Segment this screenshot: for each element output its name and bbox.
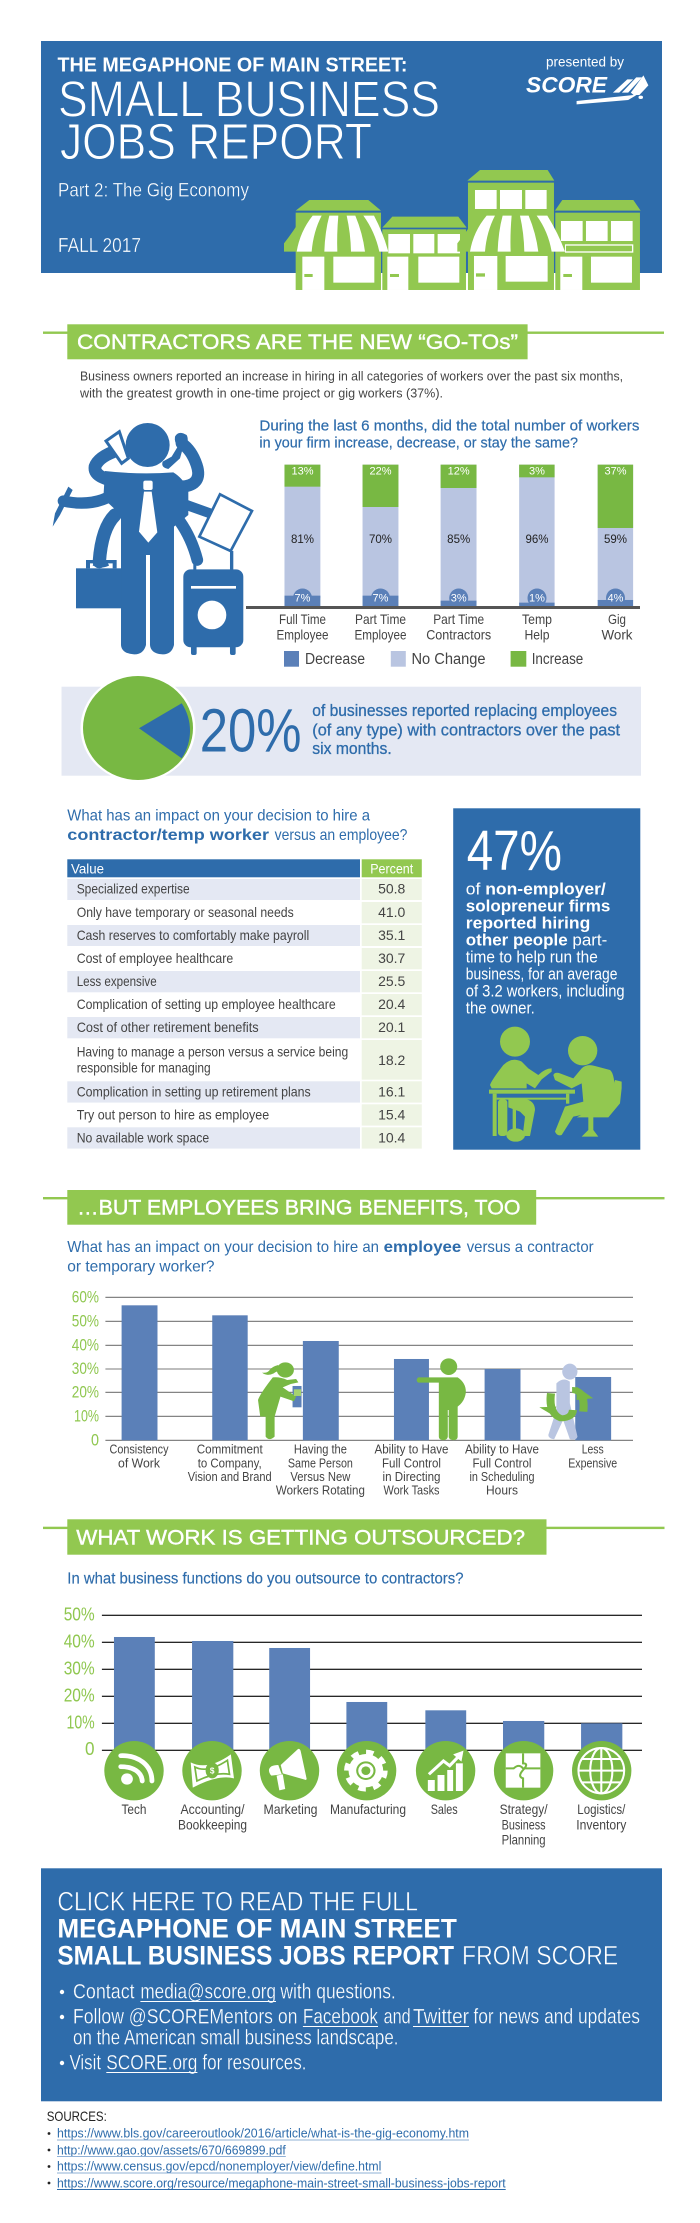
y axis labels: 40% — [64, 1632, 95, 1652]
icon: megaphone — [269, 1749, 307, 1790]
table rows values: 15.4 — [378, 1106, 406, 1122]
decrease values: 1% — [529, 592, 545, 604]
title kicker: THE MEGAPHONE OF MAIN STREET: — [58, 55, 408, 77]
decrease values: 7% — [295, 592, 311, 604]
table rows text: Complication of setting up employee healthcare — [77, 996, 336, 1012]
category labels: Manufacturing — [330, 1801, 406, 1817]
main title: JOBS REPORT — [60, 113, 372, 170]
cta heading: FROM SCORE — [462, 1940, 618, 1970]
category labels — [122, 1801, 626, 1847]
x axis labels: Having the — [294, 1441, 347, 1456]
category labels: Marketing — [264, 1801, 318, 1817]
category labels: Part Time — [355, 611, 406, 627]
panel: 47 percent solopreneurs — [453, 808, 640, 1150]
question: contractor decision: What has an impact on your decision to hire a — [67, 808, 370, 825]
stat description: other people part- — [466, 931, 607, 950]
y axis labels: 50% — [64, 1605, 95, 1625]
table rows values: 35.1 — [378, 927, 406, 943]
cta bullets: on the American small business landscape. — [73, 2027, 398, 2050]
table rows values: 10.4 — [378, 1129, 406, 1145]
source links: http://www.gao.gov/assets/670/669899.pdf — [57, 2142, 286, 2157]
section heading: employees: …BUT EMPLOYEES BRING BENEFITS, TOO — [77, 1196, 520, 1219]
bars — [114, 1637, 622, 1750]
decrease values: 3% — [451, 592, 467, 604]
cta bullets: SCORE.org — [106, 2051, 197, 2074]
icon: sales chart — [428, 1751, 464, 1791]
table rows values: 25.5 — [378, 973, 406, 989]
category labels: Planning — [502, 1831, 546, 1847]
no change values: 59% — [604, 534, 627, 546]
question: workers change: During the last 6 months, did the total number of workers — [259, 418, 639, 435]
cta bullets: for resources. — [202, 2051, 306, 2074]
presented by SCORE logo — [526, 55, 648, 104]
x axis labels: Vision and Brand — [188, 1469, 272, 1484]
table rows text: Only have temporary or seasonal needs — [77, 904, 294, 920]
decrease values — [295, 592, 624, 604]
legend: Decrease — [305, 651, 365, 668]
cta bullets: for news and updates — [473, 2006, 640, 2029]
cta heading: MEGAPHONE OF MAIN STREET — [57, 1913, 457, 1943]
question: contractor decision — [67, 808, 407, 844]
cta bullets — [60, 1981, 640, 2074]
icon: money — [191, 1754, 234, 1788]
intro text: with the greatest growth in one-time project or gig workers (37%). — [79, 385, 443, 400]
y axis labels: 10% — [66, 1713, 95, 1733]
category labels: Help — [524, 626, 550, 642]
question: contractor decision: versus an employee? — [275, 827, 407, 844]
x axis labels: Same Person — [288, 1455, 353, 1470]
question: employee decision — [67, 1239, 594, 1275]
question: employee decision: employee — [384, 1239, 461, 1256]
category labels: Inventory — [576, 1816, 626, 1832]
table rows values: 20.4 — [378, 996, 406, 1012]
y axis labels: 30% — [64, 1659, 95, 1679]
table rows text — [77, 881, 348, 1145]
no change values: 96% — [525, 534, 549, 546]
category labels: Contractors — [426, 626, 491, 642]
source links: https://www.bls.gov/careeroutlook/2016/article/what-is-the-gig-economy.htm — [57, 2126, 469, 2141]
intro text: Business owners reported an increase in hiring in all categories of workers over the past six months, — [80, 369, 623, 384]
y axis labels: 0 — [91, 1431, 99, 1450]
callout: 20 percent replaced employees: (of any type) with contractors over the past — [312, 721, 620, 739]
stacked bar chart: workforce change — [246, 465, 640, 668]
question: contractor decision: contractor/temp worker — [67, 827, 269, 844]
y axis labels: 20% — [64, 1686, 95, 1706]
section heading: employees — [43, 1190, 664, 1225]
category labels: Logistics/ — [577, 1801, 625, 1817]
y axis labels: 10% — [74, 1407, 99, 1426]
category labels: Sales — [431, 1801, 458, 1817]
table rows text: Cash reserves to comfortably make payroll — [77, 927, 309, 943]
bars — [122, 1305, 611, 1440]
category labels: Part Time — [433, 611, 484, 627]
cta bullets: Contact — [73, 1981, 135, 2004]
y axis labels: 40% — [72, 1336, 99, 1355]
table rows values: 16.1 — [378, 1083, 406, 1099]
no change values: 70% — [369, 534, 392, 546]
cta bullets: media@score.org — [140, 1981, 276, 2004]
table rows values: 20.1 — [378, 1019, 406, 1035]
category labels: Strategy/ — [500, 1801, 548, 1817]
sources: SOURCES: — [47, 2108, 107, 2124]
icon: globe — [578, 1748, 624, 1793]
x axis labels: in Scheduling — [470, 1469, 534, 1484]
category labels: Business — [502, 1816, 546, 1832]
cta bullets: Twitter — [413, 2006, 469, 2029]
x axis labels: Versus New — [290, 1469, 351, 1484]
x axis labels: in Directing — [382, 1469, 440, 1484]
stat description: of non-employer/ — [466, 880, 606, 899]
x axis labels: to Company, — [198, 1455, 262, 1470]
table rows values: 50.8 — [378, 881, 406, 897]
x axis labels: Workers Rotating — [276, 1483, 365, 1498]
icon: puzzle — [506, 1753, 540, 1788]
source links: https://www.score.org/resource/megaphone-main-street-small-business-jobs-report — [57, 2175, 506, 2190]
y axis labels — [64, 1605, 95, 1759]
increase values: 37% — [604, 466, 627, 478]
source links: https://www.census.gov/epcd/nonemployer/view/define.html — [57, 2159, 382, 2174]
cta heading — [57, 1887, 618, 1970]
category labels: Full Time — [279, 611, 326, 627]
x axis labels: Full Control — [382, 1455, 441, 1470]
legend: Increase — [532, 651, 583, 668]
cta bullets: Visit — [70, 2051, 101, 2074]
callout: 20 percent replaced employees: six months. — [312, 740, 392, 758]
category labels: Bookkeeping — [178, 1816, 247, 1832]
subtitle: Part 2: The Gig Economy — [58, 180, 249, 202]
x axis labels: Work Tasks — [384, 1483, 440, 1498]
category labels: Employee — [354, 626, 407, 642]
table rows text: Complication in setting up retirement plans — [77, 1083, 311, 1099]
x axis labels: Commitment — [197, 1441, 263, 1456]
y axis labels: 60% — [72, 1288, 99, 1307]
source links — [48, 2126, 506, 2190]
y axis labels — [72, 1288, 99, 1450]
cta heading: SMALL BUSINESS JOBS REPORT — [57, 1940, 454, 1970]
table rows text: Specialized expertise — [77, 881, 190, 897]
question: employee decision: or temporary worker? — [67, 1258, 215, 1275]
icon: walker with cycle arrows — [539, 1364, 593, 1440]
table: hiring factors — [67, 859, 422, 1149]
icon: two people at table — [489, 1027, 622, 1142]
table rows values — [378, 881, 406, 1145]
section heading: outsourced — [43, 1519, 664, 1555]
pie chart — [80, 674, 196, 782]
presented by SCORE logo: presented by — [546, 55, 624, 70]
table: hiring factors: Percent — [370, 860, 413, 876]
icon: storefronts — [284, 170, 641, 290]
stat description: business, for an average — [466, 964, 617, 983]
stat description: of 3.2 workers, including — [466, 981, 625, 1000]
category labels: Gig — [608, 611, 626, 627]
bar chart: employee benefits — [72, 1288, 633, 1498]
increase values: 12% — [448, 466, 470, 478]
question: employee decision: What has an impact on your decision to hire an — [67, 1239, 379, 1256]
y axis labels: 50% — [72, 1312, 99, 1331]
question: workers change — [259, 418, 639, 451]
icon: money: $ — [210, 1767, 215, 1776]
increase values — [291, 466, 627, 478]
decrease values: 4% — [608, 592, 624, 604]
table rows text: Try out person to hire as employee — [77, 1106, 269, 1122]
decrease values: 7% — [373, 592, 389, 604]
x axis labels: Ability to Have — [465, 1441, 539, 1456]
call to action panel — [41, 1868, 662, 2101]
question: employee decision: versus a contractor — [467, 1239, 594, 1256]
no change values: 85% — [447, 534, 470, 546]
icon: tech rss — [121, 1756, 152, 1785]
presented by SCORE logo: SCORE — [526, 73, 608, 98]
icon: multitasking businessman — [53, 423, 252, 655]
question: outsourced functions: In what business functions do you outsource to contractors? — [67, 1570, 464, 1587]
legend — [284, 651, 583, 668]
table rows text: responsible for managing — [77, 1059, 211, 1075]
x axis labels: Hours — [486, 1483, 518, 1498]
main title — [58, 71, 440, 170]
increase values: 3% — [529, 466, 545, 478]
stat description: solopreneur firms — [466, 897, 610, 916]
cta bullets: Follow @SCOREMentors on — [73, 2006, 298, 2029]
x axis labels: Ability to Have — [374, 1441, 448, 1456]
table rows text: Having to manage a person versus a service being — [77, 1043, 348, 1059]
header banner — [41, 41, 662, 290]
increase values: 22% — [369, 466, 392, 478]
icon row circles — [104, 1741, 631, 1800]
category labels: Temp — [522, 611, 552, 627]
cta bullets: and — [384, 2006, 411, 2029]
icon: gear — [346, 1752, 385, 1789]
table rows text: Less expensive — [77, 973, 157, 989]
table rows text: Cost of other retirement benefits — [77, 1019, 259, 1035]
stat description: the owner. — [466, 998, 535, 1017]
stat description — [466, 880, 625, 1017]
x axis labels: of Work — [118, 1455, 160, 1470]
callout: 20 percent replaced employees — [62, 674, 641, 782]
section heading: contractors — [43, 324, 664, 359]
stat description: time to help run the — [466, 948, 598, 967]
table rows values: 41.0 — [378, 904, 406, 920]
cta heading: CLICK HERE TO READ THE FULL — [57, 1887, 418, 1917]
date: FALL 2017 — [58, 235, 141, 257]
table rows text: No available work space — [77, 1129, 209, 1145]
x axis labels — [110, 1441, 617, 1498]
table rows values: 30.7 — [378, 950, 406, 966]
main title: SMALL BUSINESS — [58, 71, 440, 128]
section heading: contractors: CONTRACTORS ARE THE NEW “GO-TOs” — [77, 331, 518, 354]
increase values: 13% — [291, 466, 314, 478]
table rows text: Cost of employee healthcare — [77, 950, 233, 966]
cta bullets: with questions. — [280, 1981, 396, 2004]
sources — [47, 2108, 506, 2190]
category labels: Tech — [122, 1801, 146, 1817]
icon: woman at clipboard — [258, 1362, 302, 1439]
no change values: 81% — [291, 534, 314, 546]
icon: man pointing — [417, 1358, 466, 1440]
category labels: Accounting/ — [180, 1801, 245, 1817]
x axis labels: Expensive — [568, 1455, 617, 1470]
table: hiring factors: Value — [71, 860, 104, 876]
category labels: Work — [602, 626, 633, 642]
section heading: outsourced: WHAT WORK IS GETTING OUTSOURCED? — [76, 1526, 525, 1549]
category labels: Employee — [276, 626, 329, 642]
callout: 20 percent replaced employees: of businesses reported replacing employees — [312, 702, 617, 720]
no change values — [291, 534, 627, 546]
big stat: 47% — [467, 819, 562, 883]
table rows values: 18.2 — [378, 1052, 406, 1068]
x axis labels: Less — [582, 1441, 604, 1456]
category labels — [276, 611, 633, 642]
stat description: reported hiring — [466, 914, 590, 933]
intro text — [79, 369, 623, 400]
question: workers change: in your firm increase, decrease, or stay the same? — [259, 434, 578, 451]
callout: 20 percent replaced employees: 20% — [200, 697, 302, 765]
y axis labels: 20% — [72, 1383, 99, 1402]
y axis labels: 30% — [72, 1359, 99, 1378]
y axis labels: 0 — [85, 1739, 94, 1759]
x axis labels: Consistency — [110, 1441, 169, 1456]
legend: No Change — [412, 651, 486, 668]
bar chart: outsourced functions — [64, 1605, 642, 1847]
x axis labels: Full Control — [472, 1455, 532, 1470]
cta bullets: Facebook — [303, 2006, 378, 2029]
